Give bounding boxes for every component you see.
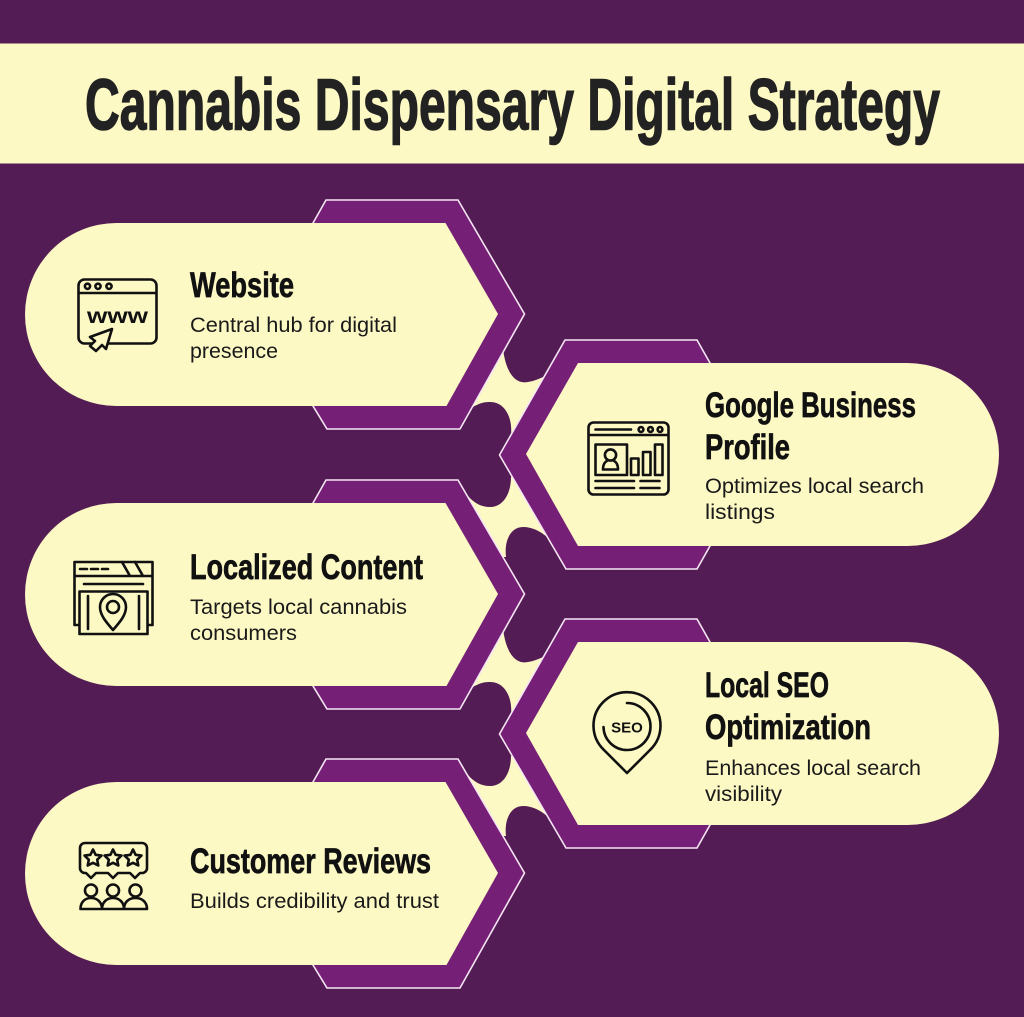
icon: www browser window with cursor [78, 280, 156, 351]
heading: local seo optimization: Local SEO [705, 665, 829, 705]
panel: local seo optimization [500, 619, 999, 848]
description: google business profile: listings [705, 501, 775, 524]
connector: google business profile to localized content [460, 477, 556, 557]
connector: website to google business profile [462, 348, 552, 440]
connector: local seo to customer reviews [460, 756, 556, 836]
card: google business profile [526, 363, 999, 546]
description: google business profile: Optimizes local search [705, 475, 924, 498]
hexagon backing: localized content [313, 480, 524, 709]
hexagon backing: local seo optimization [500, 619, 710, 848]
icon: seo map pin: SEO [611, 720, 643, 736]
icon: www browser window with cursor: www [86, 305, 149, 328]
hexagon backing: customer reviews [313, 759, 524, 988]
icon: star reviews and customers [80, 843, 147, 909]
description: local seo optimization: Enhances local search [705, 757, 921, 780]
description: customer reviews: Builds credibility and trust [190, 890, 439, 913]
card: local seo optimization [526, 642, 999, 825]
title band [0, 44, 1024, 164]
heading: google business profile [705, 385, 916, 467]
description: website: presence [190, 340, 278, 363]
description: localized content [190, 596, 407, 645]
hexagon backing: google business profile [500, 340, 710, 569]
description: localized content: Targets local cannabis [190, 596, 407, 619]
panel: localized content [25, 480, 524, 709]
description: local seo optimization [705, 757, 921, 806]
card: customer reviews [25, 782, 498, 965]
description: google business profile [705, 475, 924, 524]
panel: website [25, 200, 524, 429]
icon: business profile window with chart [588, 422, 668, 494]
hexagon backing: website [313, 200, 524, 429]
heading: google business profile: Profile [705, 427, 790, 467]
connector: localized content to local seo [462, 628, 552, 720]
heading: google business profile: Google Business [705, 385, 916, 425]
heading: local seo optimization: Optimization [705, 707, 871, 747]
heading: local seo optimization [705, 665, 871, 747]
description: website [190, 314, 397, 363]
panel: google business profile [500, 340, 999, 569]
icon: location page [74, 562, 152, 634]
description: local seo optimization: visibility [705, 783, 783, 806]
panel: customer reviews [25, 759, 524, 988]
icon: seo map pin [594, 692, 660, 773]
heading: customer reviews: Customer Reviews [190, 841, 431, 881]
description: localized content: consumers [190, 622, 297, 645]
heading: localized content: Localized Content [190, 547, 423, 587]
heading: website: Website [190, 265, 294, 305]
description: website: Central hub for digital [190, 314, 397, 337]
card: localized content [25, 503, 498, 686]
card: website [25, 223, 498, 406]
